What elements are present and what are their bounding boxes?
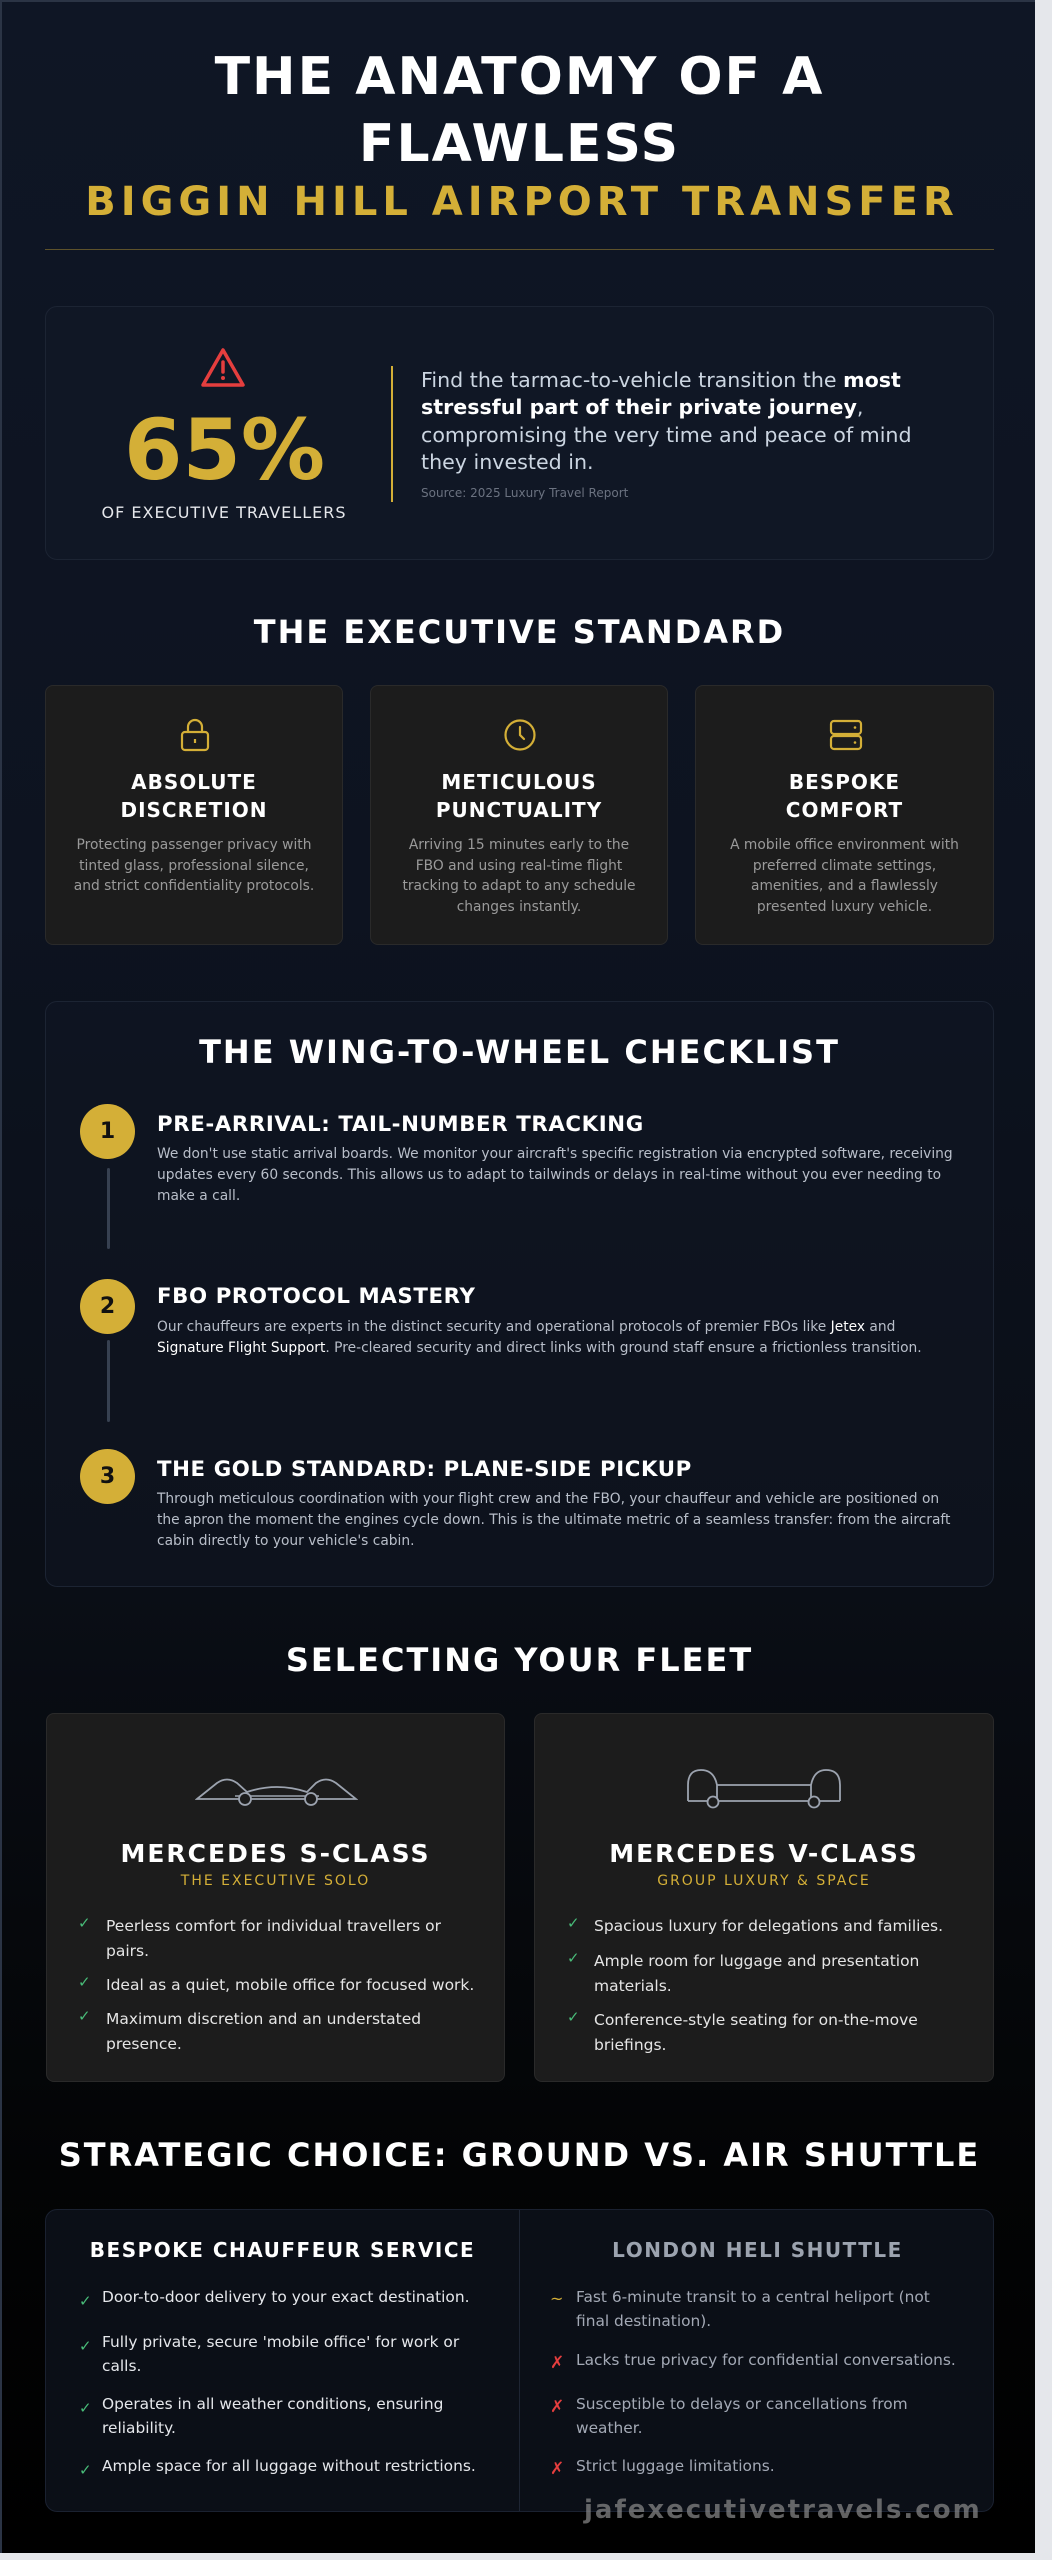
card: v-class: Ample room for luggage and presentation [594,1952,919,1970]
card: comfort: COMFORT [786,798,903,822]
step 1 [80,1104,953,1249]
heading: executive standard: THE EXECUTIVE STANDARD [254,613,785,651]
column: heli shuttle: ✗ [550,2353,564,2373]
stat description: they invested in. [421,450,594,474]
card: punctuality: tracking to adapt to any schedule [402,878,636,894]
icon: lock [180,718,210,752]
step 1: We don't use static arrival boards. We monitor your aircraft's specific registration via encrypted software, receiving [157,1146,953,1162]
card: s-class: Peerless comfort for individual travellers or [106,1917,441,1935]
column: heli shuttle: LONDON HELI SHUTTLE [612,2238,903,2262]
column: chauffeur: reliability. [102,2419,176,2437]
step 2 [80,1279,922,1422]
card: punctuality: METICULOUS [441,770,597,794]
stat description: compromising the very time and peace of mind [421,423,912,447]
icon: server [830,720,862,750]
card: s-class: presence. [106,2035,182,2053]
step 1: make a call. [157,1188,240,1204]
column: chauffeur: Ample space for all luggage without restrictions. [102,2457,476,2475]
column: heli shuttle: Lacks true privacy for confidential conversations. [576,2351,956,2369]
title: FLAWLESS [359,114,680,174]
stat number: 65% [124,401,325,499]
card: s-class: ✓ [78,2007,91,2025]
card: discretion: and strict confidentiality protocols. [74,878,314,894]
step 1: 1 [100,1119,115,1144]
column: chauffeur: ✓ [79,2399,92,2417]
step 1: PRE-ARRIVAL: TAIL-NUMBER TRACKING [157,1112,644,1137]
column: heli shuttle [550,2238,956,2479]
subtitle: BIGGIN HILL AIRPORT TRANSFER [85,179,959,225]
card: comfort: A mobile office environment with [730,837,959,853]
column: heli shuttle: ✗ [550,2397,564,2417]
card: v-class: briefings. [594,2036,666,2054]
source: Source: 2025 Luxury Travel Report [421,486,628,500]
step 3 [80,1449,950,1549]
card: s-class: Maximum discretion and an understated [106,2010,421,2028]
panel: statistic [45,306,994,560]
column: chauffeur: Fully private, secure 'mobile office' for work or [102,2333,459,2351]
column: heli shuttle: ✗ [550,2459,564,2479]
card: punctuality: PUNCTUALITY [436,798,602,822]
card: s-class: THE EXECUTIVE SOLO [181,1873,370,1889]
panel: checklist [45,1001,994,1587]
card: s-class: ✓ [78,1914,91,1932]
card: v-class [534,1713,994,2082]
column: chauffeur: Door-to-door delivery to your exact destination. [102,2288,469,2306]
card: comfort: preferred climate settings, [753,858,936,874]
card: discretion: Protecting passenger privacy with [77,837,311,853]
card: v-class: materials. [594,1977,672,1995]
icon: sedan [195,1778,358,1806]
card: punctuality [370,685,668,945]
card: v-class: ✓ [567,1949,580,1967]
step 1: updates every 60 seconds. This allows us to adapt to tailwinds or delays in real-time without you ever needing to [157,1167,941,1183]
title [214,47,824,174]
card: punctuality: Arriving 15 minutes early to the [409,837,629,853]
icon: warning [201,348,245,387]
stat description [421,368,912,474]
column: heli shuttle: weather. [576,2419,643,2437]
card: s-class: Ideal as a quiet, mobile office for focused work. [106,1976,474,1994]
heading: checklist: THE WING-TO-WHEEL CHECKLIST [199,1033,840,1071]
step 3: cabin directly to your vehicle's cabin. [157,1533,414,1549]
card: v-class: ✓ [567,2008,580,2026]
step 2: Signature Flight Support. Pre-cleared security and direct links with ground staff ensure a frictionless transition. [157,1340,922,1356]
card: punctuality: changes instantly. [457,898,581,914]
column: heli shuttle: Fast 6-minute transit to a central heliport (not [576,2288,930,2306]
title: THE ANATOMY OF A [215,47,824,107]
step 3: Through meticulous coordination with your flight crew and the FBO, your chauffeur and vehicle are positioned on [157,1491,939,1507]
column: chauffeur: ✓ [79,2461,92,2479]
stat description: Find the tarmac-to-vehicle transition the most [421,368,901,392]
step 2: Our chauffeurs are experts in the distinct security and operational protocols of premier FBOs like Jetex and [157,1319,895,1335]
card: s-class: MERCEDES S-CLASS [120,1839,431,1868]
card: s-class: pairs. [106,1942,149,1960]
column: chauffeur [79,2238,476,2479]
card: s-class: ✓ [78,1973,91,1991]
heading: strategic choice: STRATEGIC CHOICE: GROUND VS. AIR SHUTTLE [59,2136,980,2174]
icon: van [687,1769,841,1808]
step 3: the apron the moment the engines cycle down. This is the ultimate metric of a seamless transfer: from the aircraft [157,1512,950,1528]
column: heli shuttle: Susceptible to delays or cancellations from [576,2395,908,2413]
column: heli shuttle: Strict luggage limitations. [576,2457,775,2475]
step 3: THE GOLD STANDARD: PLANE-SIDE PICKUP [157,1457,692,1482]
panel: comparison [45,2209,994,2512]
card: comfort: amenities, and a flawlessly [751,878,938,894]
card: discretion [45,685,343,945]
icon: clock [504,719,536,751]
step 2: 2 [100,1294,115,1319]
watermark: jafexecutivetravels.com [584,2495,982,2525]
step 3: 3 [100,1464,115,1489]
column: chauffeur: ✓ [79,2337,92,2355]
card: s-class [46,1713,505,2082]
heading: fleet: SELECTING YOUR FLEET [286,1641,753,1679]
stat label: OF EXECUTIVE TRAVELLERS [101,503,346,522]
card: comfort [695,685,994,945]
column: heli shuttle: final destination). [576,2312,711,2330]
column: heli shuttle: ~ [550,2289,563,2308]
column: chauffeur: BESPOKE CHAUFFEUR SERVICE [90,2238,475,2262]
column: chauffeur: Operates in all weather conditions, ensuring [102,2395,443,2413]
card: comfort: BESPOKE [789,770,900,794]
card: v-class: ✓ [567,1914,580,1932]
card: comfort: presented luxury vehicle. [757,898,932,914]
card: discretion: DISCRETION [120,798,268,822]
stat description: stressful part of their private journey, [421,395,863,419]
card: discretion: tinted glass, professional silence, [79,858,309,874]
card: v-class: GROUP LUXURY & SPACE [657,1873,871,1889]
card: v-class: Spacious luxury for delegations and families. [594,1917,943,1935]
card: punctuality: FBO and using real-time flight [416,858,622,874]
step 2: FBO PROTOCOL MASTERY [157,1284,476,1309]
column: chauffeur: calls. [102,2357,141,2375]
card: discretion: ABSOLUTE [131,770,257,794]
card: v-class: MERCEDES V-CLASS [609,1839,919,1868]
column: chauffeur: ✓ [79,2292,92,2310]
card: v-class: Conference-style seating for on-the-move [594,2011,918,2029]
